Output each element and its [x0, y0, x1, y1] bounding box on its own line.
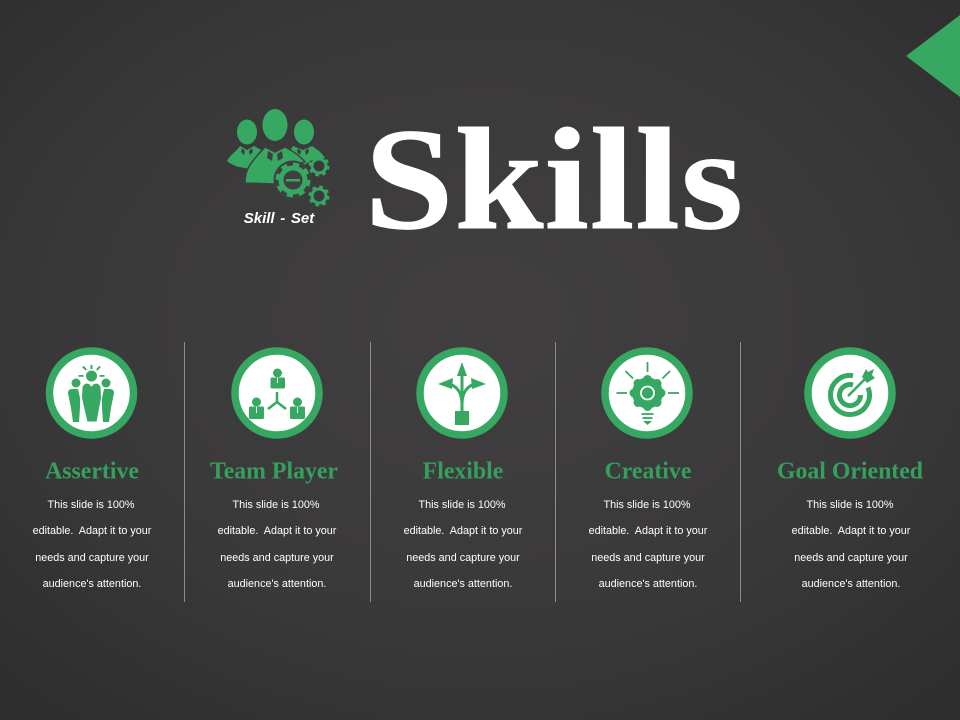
- description: needs and capture your: [794, 552, 908, 564]
- description: audience's attention.: [43, 578, 141, 590]
- description: needs and capture your: [591, 552, 705, 564]
- description: This slide is 100%: [418, 499, 506, 511]
- description: needs and capture your: [35, 552, 149, 564]
- icon: target with dart: [808, 351, 892, 435]
- description: needs and capture your: [406, 552, 520, 564]
- description: editable. Adapt it to your: [792, 525, 911, 537]
- heading: Team Player: [210, 458, 338, 484]
- column dividers: [184, 342, 740, 602]
- description: editable. Adapt it to your: [404, 525, 523, 537]
- description: This slide is 100%: [232, 499, 320, 511]
- description: audience's attention.: [802, 578, 900, 590]
- description: This slide is 100%: [806, 499, 894, 511]
- title: Skills: [364, 100, 744, 260]
- heading: Assertive: [45, 458, 139, 484]
- description: editable. Adapt it to your: [218, 525, 337, 537]
- panel: assertive: [33, 351, 152, 590]
- panel: creative: [589, 351, 708, 590]
- description: [792, 499, 911, 590]
- icon caption: Skill - Set: [244, 210, 315, 227]
- panel: flexible: [404, 351, 523, 590]
- description: audience's attention.: [414, 578, 512, 590]
- description: editable. Adapt it to your: [589, 525, 708, 537]
- description: [589, 499, 708, 590]
- icon: group of people: [50, 351, 134, 435]
- panel: team player: [210, 351, 338, 590]
- description: [33, 499, 152, 590]
- description: This slide is 100%: [47, 499, 135, 511]
- corner triangle: [906, 15, 960, 97]
- heading: Flexible: [423, 458, 503, 484]
- heading: Goal Oriented: [777, 458, 923, 484]
- description: This slide is 100%: [603, 499, 691, 511]
- description: audience's attention.: [599, 578, 697, 590]
- heading: Creative: [605, 458, 691, 484]
- icon: branching arrows: [420, 351, 504, 435]
- icon: gear light bulb: [605, 351, 689, 435]
- description: [404, 499, 523, 590]
- description: needs and capture your: [220, 552, 334, 564]
- description: editable. Adapt it to your: [33, 525, 152, 537]
- icon: skill set people and gears: [227, 109, 328, 205]
- description: [218, 499, 337, 590]
- description: audience's attention.: [228, 578, 326, 590]
- panel: goal oriented: [777, 351, 923, 590]
- icon: three connected people: [235, 351, 319, 435]
